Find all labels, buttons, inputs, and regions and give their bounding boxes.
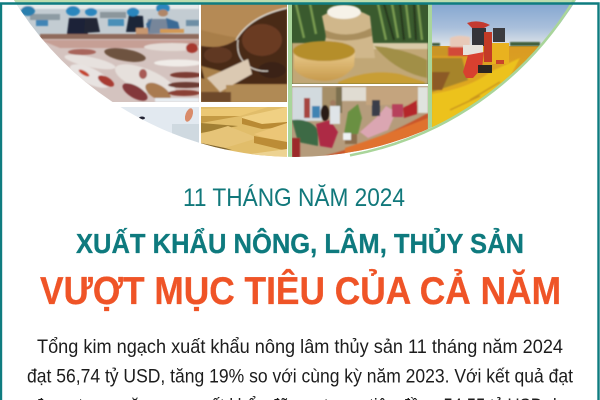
photo: rice sack and bowl — [292, 0, 428, 84]
white gaps between photos — [0, 0, 428, 160]
body text: Tổng kim ngạch xuất khẩu nông lâm thủy sản 11 tháng năm 2024 — [37, 336, 563, 358]
green arc rim — [350, 0, 574, 155]
green separators — [288, 0, 432, 160]
title line 2: VƯỢT MỤC TIÊU CỦA CẢ NĂM — [40, 269, 561, 313]
photo: workers sorting harvest — [292, 86, 428, 160]
photo: fish tray on pale blue — [120, 107, 199, 143]
title line 1: XUẤT KHẨU NÔNG, LÂM, THỦY SẢN — [76, 227, 524, 259]
photo: coffee beans in burlap sack — [201, 0, 287, 102]
photo: fish processing workers — [14, 0, 199, 102]
top pale green strip — [0, 0, 600, 2]
photo: stacked bamboo planks — [201, 107, 287, 159]
photo: combine harvester in rice field — [432, 0, 576, 128]
body text — [27, 336, 574, 400]
photo collage clipped to a circular arc — [0, 0, 600, 160]
subtitle: 11 THÁNG NĂM 2024 — [183, 183, 405, 212]
